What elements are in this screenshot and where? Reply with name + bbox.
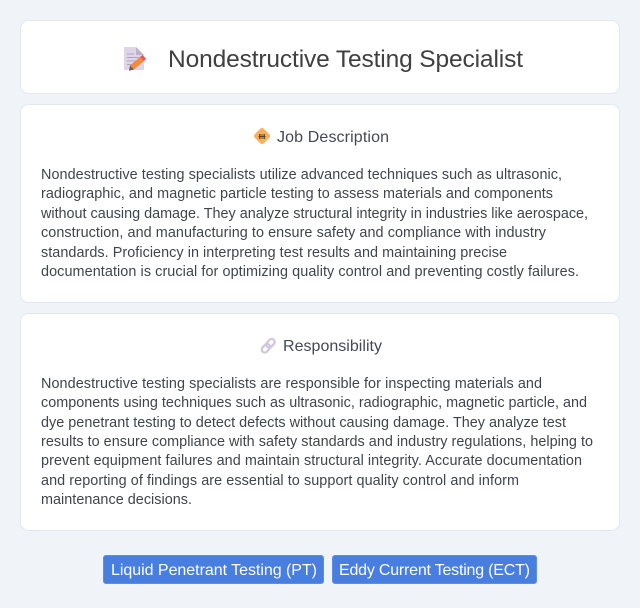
text block: responsibility: and reporting of findings are essential to support quality control and inform: [41, 473, 519, 489]
panel: job description: [20, 104, 620, 302]
button: liquid penetrant testing: Liquid Penetrant Testing (PT): [111, 562, 317, 579]
icon: chain link: [261, 338, 276, 354]
icon: orange warning diamond: [253, 127, 271, 145]
text block: responsibility: prevent equipment failures and maintain structural integrity. Accurate documentation: [41, 453, 582, 469]
text block: job description: radiographic, and magnetic particle testing to assess materials and components: [41, 186, 553, 202]
text block: job description: documentation is crucial for optimizing quality control and preventing costly failures.: [41, 264, 579, 280]
text block: responsibility: dye penetrant testing to detect defects without causing damage. They analyze test: [41, 415, 566, 431]
panel: title card: [20, 20, 620, 94]
text block: responsibility: results to ensure compliance with safety standards and industry regulations, helping to: [41, 434, 593, 450]
text block: responsibility: maintenance decisions.: [41, 492, 192, 508]
button: eddy current testing: [332, 556, 536, 584]
text block: responsibility: components using techniques such as ultrasonic, radiographic, magnetic particle, and: [41, 395, 587, 411]
text block: job description: construction, and manufacturing to ensure safety and compliance with industry: [41, 225, 547, 241]
text block: job description: standards. Proficiency in interpreting test results and maintaining precise: [41, 245, 507, 261]
panel: responsibility: [20, 314, 620, 530]
button: eddy current testing: Eddy Current Testing (ECT): [339, 562, 530, 579]
button: liquid penetrant testing: [104, 556, 324, 584]
title: Nondestructive Testing Specialist: [168, 46, 523, 73]
heading: job description: Job Description: [277, 129, 389, 146]
text block: job description: Nondestructive testing specialists utilize advanced techniques such as ultrasonic,: [41, 167, 562, 183]
heading: responsibility: Responsibility: [283, 338, 382, 355]
text block: responsibility: Nondestructive testing specialists are responsible for inspecting materials and: [41, 376, 542, 392]
text block: responsibility: [41, 376, 593, 508]
icon: document with pencil: [124, 47, 146, 71]
text block: job description: [40, 167, 588, 280]
text block: job description: without causing damage. They analyze structural integrity in industries like aerospace,: [40, 206, 588, 222]
